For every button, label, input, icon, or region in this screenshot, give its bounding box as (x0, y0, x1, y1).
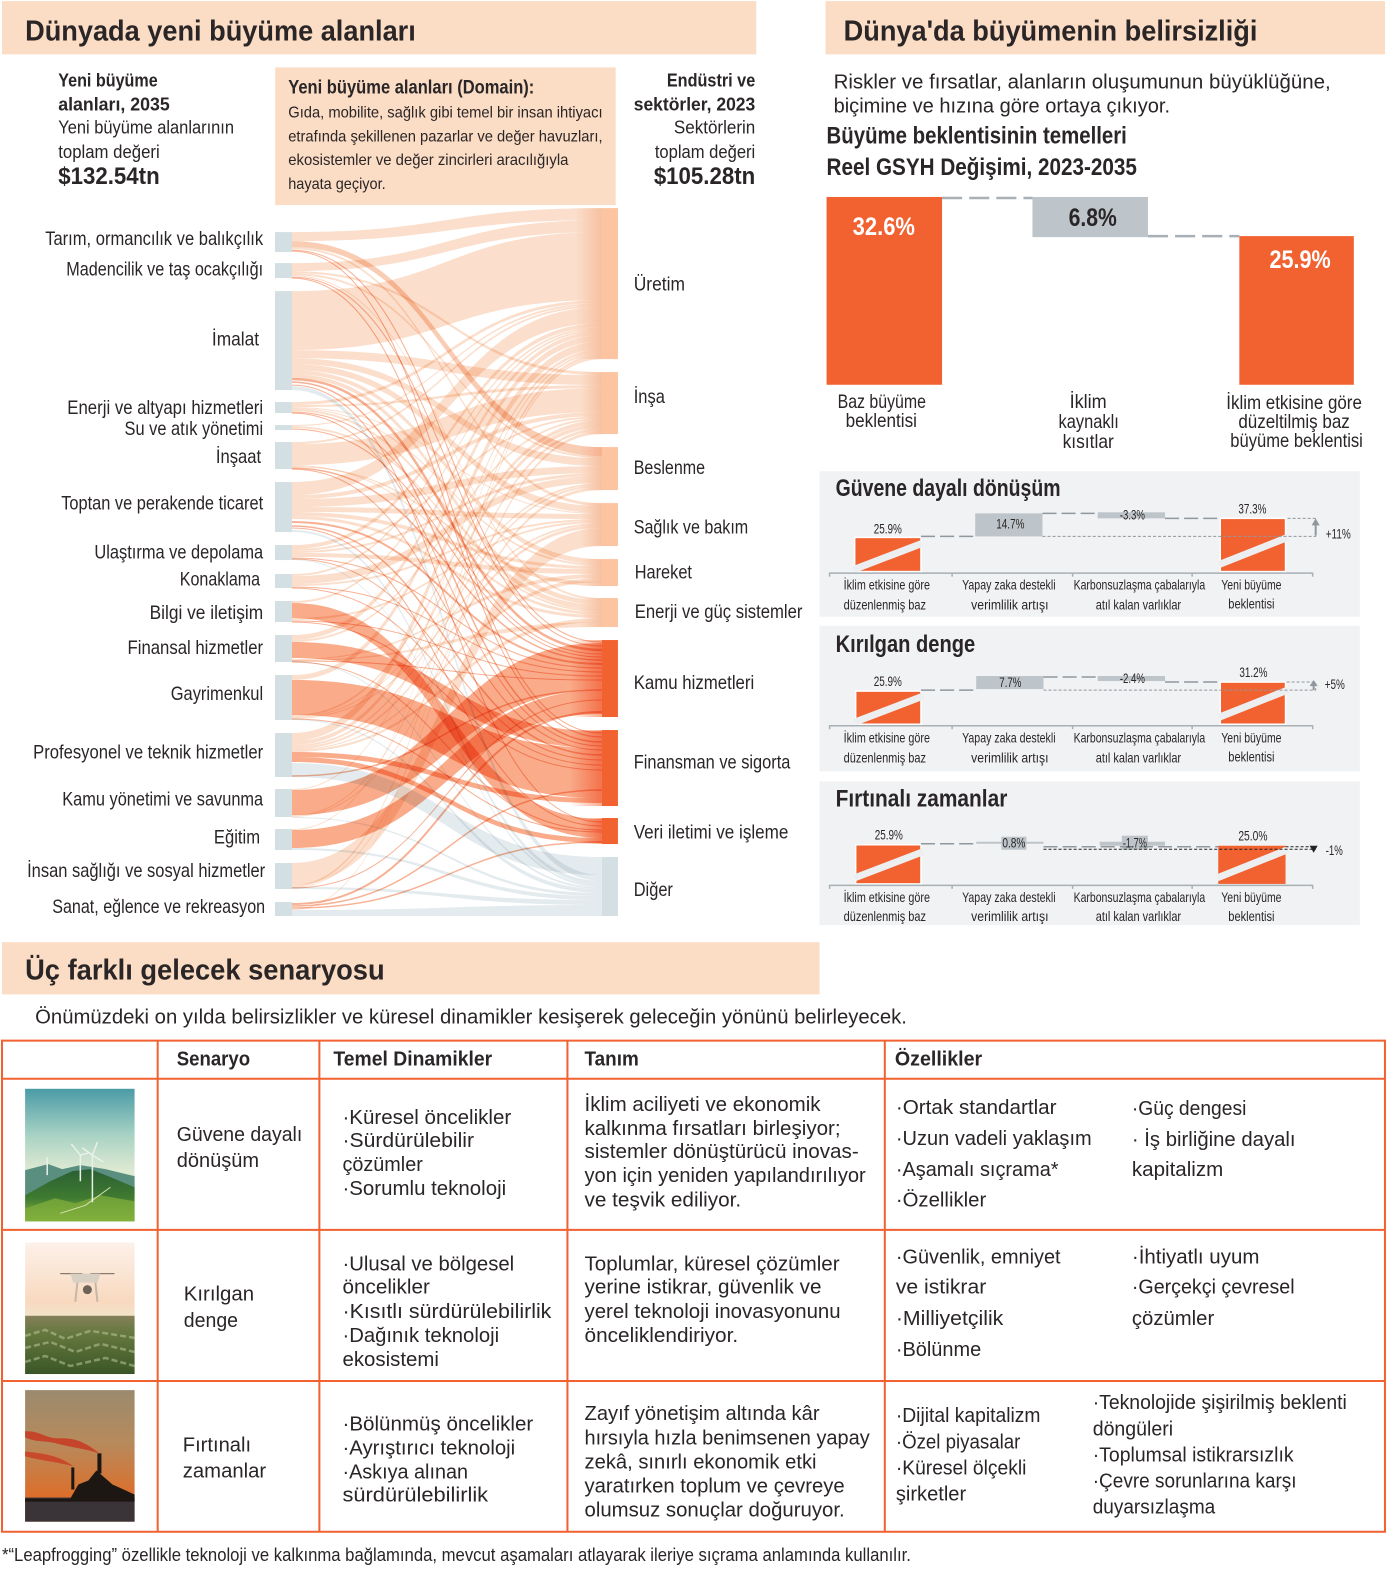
row: Kırılgan denge: çözümler (1132, 1308, 1215, 1330)
intro text: riskler ve fırsatlar (834, 71, 1331, 118)
axis labels: beklentisi (1228, 748, 1274, 764)
bar labels: kaynaklı (1059, 412, 1119, 433)
subtitle: Önümüzdeki on yılda belirsizlikler ve küresel dinamikler kesişerek geleceğin yönünü belirleyecek. (35, 1007, 907, 1029)
source labels: Sanat, eğlence ve rekreasyon (52, 897, 265, 918)
text block: yeni büyüme alanları toplam değeri: Yeni büyüme (58, 70, 158, 90)
row: Kırılgan denge: ekosistemi (342, 1349, 439, 1371)
row: Fırtınalı zamanlar: ·Dijital kapitalizm (896, 1405, 1040, 1427)
source labels: İmalat (212, 330, 260, 351)
source labels: Su ve atık yönetimi (125, 419, 263, 440)
row: Kırılgan denge: ·Ulusal ve bölgesel (342, 1254, 514, 1276)
chart heading: Büyüme beklentisinin temelleri (827, 123, 1127, 150)
axis labels: düzenlenmiş baz (844, 749, 926, 765)
row: Kırılgan denge: ·Bölünme (896, 1339, 981, 1361)
row: Güvene dayalı dönüşüm: ·Güç dengesi (1132, 1098, 1246, 1120)
waterfall: +5% (1325, 676, 1345, 692)
section heading: Dünyada yeni büyüme alanları: Dünyada yeni büyüme alanları (25, 15, 416, 47)
table header (177, 1048, 982, 1071)
row: Güvene dayalı dönüşüm: kalkınma fırsatları birleşiyor; (585, 1118, 841, 1140)
row: Fırtınalı zamanlar: olumsuz sonuçlar doğuruyor. (585, 1500, 845, 1522)
waterfall: -2.4% (1120, 670, 1145, 686)
bar: baz büyüme: 32.6% (853, 213, 915, 241)
axis labels: Yapay zaka destekli (962, 889, 1056, 905)
waterfall: 25.9% (874, 520, 902, 536)
target labels: Enerji ve güç sistemler (635, 602, 803, 623)
bar labels: Baz büyüme (838, 392, 926, 413)
axis labels (844, 576, 1282, 613)
row: Güvene dayalı dönüşüm: ·Sorumlu teknoloji (342, 1178, 506, 1200)
row: Kırılgan denge: yerel teknoloji inovasyonunu (585, 1301, 841, 1323)
target labels: İnşa (634, 387, 665, 408)
row: Kırılgan denge: Kırılgan (184, 1284, 254, 1306)
table header: Senaryo (177, 1049, 250, 1071)
bar: baz büyüme (827, 197, 942, 385)
row: Kırılgan denge: ·Kısıtlı sürdürülebilirlik (342, 1301, 552, 1323)
target labels: Sağlık ve bakım (634, 517, 748, 538)
row: Güvene dayalı dönüşüm: ·Ortak standartlar (896, 1097, 1057, 1119)
bar: düzeltilmiş baz (1239, 236, 1354, 385)
bar labels: İklim (1070, 392, 1107, 413)
row: Fırtınalı zamanlar: ·Özel piyasalar (896, 1431, 1021, 1453)
intro text: riskler ve fırsatlar: biçimine ve hızına göre ortaya çıkıyor. (834, 96, 1170, 118)
text block: endüstri ve sektörler toplam değeri: toplam değeri (655, 142, 755, 162)
row: Fırtınalı zamanlar: Zayıf yönetişim altında kâr (585, 1403, 820, 1425)
bar labels: İklim etkisine göre (1226, 393, 1362, 414)
axis labels: atıl kalan varlıklar (1096, 749, 1181, 765)
axis labels: düzenlenmiş baz (844, 908, 926, 924)
callout: domain definition (275, 67, 616, 205)
sankey source nodes (275, 232, 292, 916)
source labels: Enerji ve altyapı hizmetleri (67, 398, 263, 419)
row: Kırılgan denge: öncelikler (342, 1277, 430, 1299)
bar: iklim kaynaklı kısıtlar: 6.8% (1069, 204, 1117, 232)
panel: Kırılgan denge: Kırılgan denge (836, 631, 975, 658)
text block: endüstri ve sektörler toplam değeri: Endüstri ve (667, 70, 755, 90)
row: Fırtınalı zamanlar: ·Teknolojide şişirilmiş beklenti (1093, 1392, 1347, 1414)
row: Kırılgan denge: ·İhtiyatlı uyum (1132, 1246, 1259, 1269)
section heading: Dünya'da büyümenin belirsizliği: Dünya'da büyümenin belirsizliği (844, 15, 1257, 47)
row: Güvene dayalı dönüşüm: yon için yeniden yapılandırılıyor (585, 1165, 866, 1187)
axis labels: verimlilik artışı (971, 908, 1049, 924)
target labels: Hareket (635, 563, 693, 584)
bar: düzeltilmiş baz: 25.9% (1269, 246, 1331, 274)
waterfall: +11% (1326, 525, 1351, 541)
panel: Fırtınalı zamanlar: Fırtınalı zamanlar (836, 786, 1008, 813)
panel: Fırtınalı zamanlar (820, 781, 1360, 925)
row: Güvene dayalı dönüşüm (177, 1093, 1296, 1211)
section heading: Dünyada yeni büyüme alanları (2, 1, 756, 54)
sankey flows (292, 208, 602, 916)
waterfall: 25.9% (875, 827, 903, 843)
waterfall: 25.9% (874, 673, 902, 689)
row: Fırtınalı zamanlar: Fırtınalı (183, 1434, 251, 1456)
source labels: Bilgi ve iletişim (150, 603, 263, 624)
source labels: Konaklama (180, 570, 260, 591)
row: Güvene dayalı dönüşüm: ·Özellikler (896, 1189, 987, 1211)
source labels: İnsan sağlığı ve sosyal hizmetler (27, 861, 266, 882)
axis labels: Karbonsuzlaşma çabalarıyla (1074, 889, 1205, 905)
row: Güvene dayalı dönüşüm: dönüşüm (177, 1150, 259, 1172)
row: Fırtınalı zamanlar: ·Bölünmüş öncelikler (342, 1413, 534, 1435)
row: Güvene dayalı dönüşüm: ve teşvik ediliyor. (585, 1189, 741, 1211)
source labels (27, 229, 266, 918)
source labels: Kamu yönetimi ve savunma (62, 790, 263, 811)
axis labels (844, 888, 1282, 924)
text block: endüstri ve sektörler toplam değeri (634, 70, 755, 190)
row: Fırtınalı zamanlar: ·Küresel ölçekli (896, 1457, 1026, 1479)
row: Kırılgan denge: ·Milliyetçilik (896, 1308, 1004, 1330)
bar labels (838, 392, 1363, 453)
row: Kırılgan denge: ·Dağınık teknoloji (342, 1325, 499, 1347)
sankey target nodes (602, 208, 618, 916)
target labels: Üretim (634, 274, 685, 295)
source labels: Eğitim (214, 828, 260, 849)
source labels: Profesyonel ve teknik hizmetler (33, 742, 264, 763)
row: Fırtınalı zamanlar: sürdürülebilirlik (342, 1485, 489, 1507)
axis labels: Yapay zaka destekli (962, 729, 1056, 745)
table header: Temel Dinamikler (333, 1049, 492, 1071)
axis labels: İklim etkisine göre (844, 728, 930, 745)
waterfall (830, 827, 1343, 889)
axis labels (844, 728, 1282, 765)
scenario table (2, 1041, 1385, 1532)
callout: domain definition: etrafında şekillenen pazarlar ve değer havuzları, (288, 128, 603, 146)
callout: domain definition: Yeni büyüme alanları (Domain): (288, 78, 534, 99)
axis labels: Yeni büyüme (1221, 889, 1282, 905)
waterfall: 37.3% (1238, 500, 1266, 516)
row: Güvene dayalı dönüşüm: Güvene dayalı (177, 1124, 302, 1146)
section heading: Üç farklı gelecek senaryosu: Üç farklı gelecek senaryosu (25, 953, 385, 986)
text block: yeni büyüme alanları toplam değeri: alanları, 2035 (58, 95, 170, 115)
footnote: *“Leapfrogging” özellikle teknoloji ve kalkınma bağlamında, mevcut aşamaları atlayarak ileriye sıçrama anlamında kullanılır. (2, 1545, 911, 1565)
row: Güvene dayalı dönüşüm: · İş birliğine dayalı (1132, 1128, 1296, 1151)
axis labels: Karbonsuzlaşma çabalarıyla (1074, 577, 1205, 593)
axis labels: Karbonsuzlaşma çabalarıyla (1074, 729, 1205, 745)
row: Fırtınalı zamanlar: yaratırken toplum ve çevreye (585, 1476, 845, 1498)
text block: endüstri ve sektörler toplam değeri: sektörler, 2023 (634, 95, 755, 115)
chart heading (827, 123, 1137, 181)
bar labels: büyüme beklentisi (1230, 431, 1363, 452)
row: Fırtınalı zamanlar: döngüleri (1093, 1418, 1173, 1440)
row: Kırılgan denge: ·Gerçekçi çevresel (1132, 1277, 1295, 1299)
waterfall (830, 500, 1351, 577)
row: Fırtınalı zamanlar: zekâ, sınırlı ekonomik etki (585, 1451, 817, 1473)
table header: Özellikler (895, 1048, 982, 1071)
row: Fırtınalı zamanlar: şirketler (896, 1484, 966, 1506)
source labels: Toptan ve perakende ticaret (61, 493, 264, 514)
axis labels: beklentisi (1228, 596, 1274, 612)
text block: yeni büyüme alanları toplam değeri (58, 70, 234, 190)
text block: endüstri ve sektörler toplam değeri: Sektörlerin (674, 118, 755, 138)
source labels: İnşaat (216, 447, 262, 468)
axis labels: Yeni büyüme (1221, 729, 1282, 745)
source labels: Madencilik ve taş ocakçılığı (66, 259, 263, 280)
bar labels: beklentisi (846, 411, 917, 432)
row: Kırılgan denge: ve istikrar (896, 1277, 987, 1299)
row: Fırtınalı zamanlar (183, 1392, 1347, 1522)
waterfall: 7.7% (999, 674, 1021, 690)
waterfall: 25.0% (1238, 828, 1267, 844)
row: Fırtınalı zamanlar: hırsıyla hızla benimsenen yapay (585, 1427, 870, 1449)
bar labels: kısıtlar (1063, 432, 1114, 453)
axis labels: Yeni büyüme (1221, 577, 1282, 593)
axis labels: atıl kalan varlıklar (1096, 908, 1181, 924)
row: Fırtınalı zamanlar: ·Çevre sorunlarına karşı (1093, 1471, 1297, 1493)
photo: factory chimneys at sunset (25, 1390, 135, 1522)
axis labels: İklim etkisine göre (844, 888, 930, 905)
row: Fırtınalı zamanlar: ·Toplumsal istikrarsızlık (1093, 1444, 1294, 1466)
waterfall chart: baseline growth (827, 197, 1363, 453)
row: Kırılgan denge: önceliklendiriyor. (585, 1325, 738, 1347)
row: Fırtınalı zamanlar: zamanlar (183, 1460, 266, 1482)
row: Güvene dayalı dönüşüm: ·Sürdürülebilir (342, 1130, 474, 1152)
callout: domain definition: ekosistemler ve değer zincirleri aracılığıyla (288, 151, 569, 169)
waterfall: 0.8% (1002, 835, 1025, 851)
panel: Güvene dayalı dönüşüm (820, 471, 1360, 617)
target labels: Beslenme (634, 458, 705, 479)
panel: Kırılgan denge (820, 626, 1360, 771)
row: Güvene dayalı dönüşüm: ·Küresel öncelikler (342, 1107, 512, 1129)
source labels: Ulaştırma ve depolama (94, 543, 263, 564)
axis labels: Yapay zaka destekli (962, 577, 1056, 593)
row: Kırılgan denge: yerine istikrar, güvenlik ve (585, 1277, 822, 1299)
row: Güvene dayalı dönüşüm: kapitalizm (1132, 1159, 1223, 1181)
table grid (2, 1041, 1385, 1532)
text block: yeni büyüme alanları toplam değeri: $132.54tn (58, 163, 160, 190)
target labels: Diğer (634, 880, 673, 901)
bar labels: düzeltilmiş baz (1238, 412, 1350, 433)
intro text: riskler ve fırsatlar: Riskler ve fırsatlar, alanların oluşumunun büyüklüğüne, (834, 71, 1331, 93)
section heading: Üç farklı gelecek senaryosu (2, 942, 820, 994)
axis labels: düzenlenmiş baz (844, 597, 926, 613)
target labels (634, 274, 803, 901)
text block: yeni büyüme alanları toplam değeri: Yeni büyüme alanlarının (58, 118, 234, 138)
waterfall: -1.7% (1123, 835, 1147, 851)
row: Güvene dayalı dönüşüm: ·Uzun vadeli yaklaşım (896, 1128, 1092, 1150)
source labels: Tarım, ormancılık ve balıkçılık (45, 229, 264, 250)
axis labels: verimlilik artışı (971, 597, 1049, 613)
callout: domain definition: Gıda, mobilite, sağlık gibi temel bir insan ihtiyacı (288, 104, 603, 122)
text block: endüstri ve sektörler toplam değeri: $105.28tn (654, 163, 755, 190)
panel: Güvene dayalı dönüşüm: Güvene dayalı dönüşüm (836, 475, 1061, 502)
row: Kırılgan denge: ·Güvenlik, emniyet (896, 1247, 1061, 1269)
waterfall: -3.3% (1120, 506, 1145, 522)
table header: Tanım (585, 1049, 639, 1071)
target labels: Veri iletimi ve işleme (634, 823, 788, 844)
waterfall: -1% (1326, 842, 1343, 858)
waterfall: 14.7% (996, 515, 1024, 531)
source labels: Gayrimenkul (171, 684, 263, 705)
axis labels: beklentisi (1228, 908, 1274, 924)
chart heading: Reel GSYH Değişimi, 2023-2035 (827, 154, 1137, 181)
target labels: Finansman ve sigorta (634, 752, 791, 773)
axis labels: verimlilik artışı (971, 749, 1049, 765)
target labels: Kamu hizmetleri (634, 673, 754, 694)
row: Kırılgan denge: Toplumlar, küresel çözümler (585, 1254, 840, 1276)
row: Kırılgan denge (184, 1246, 1295, 1371)
waterfall (830, 664, 1345, 729)
row: Fırtınalı zamanlar: ·Ayrıştırıcı teknoloji (342, 1437, 515, 1459)
section heading: Dünya'da büyümenin belirsizliği (826, 1, 1385, 54)
waterfall: 31.2% (1239, 664, 1267, 680)
photo: drone over crop field (25, 1242, 135, 1374)
callout: domain definition: hayata geçiyor. (288, 175, 386, 193)
row: Güvene dayalı dönüşüm: sistemler dönüştürücü inovas- (585, 1141, 859, 1163)
row: Kırılgan denge: denge (184, 1310, 238, 1332)
text block: yeni büyüme alanları toplam değeri: toplam değeri (58, 142, 160, 162)
axis labels: atıl kalan varlıklar (1096, 597, 1181, 613)
source labels: Finansal hizmetler (128, 638, 264, 659)
axis labels: İklim etkisine göre (844, 576, 930, 593)
row: Fırtınalı zamanlar: duyarsızlaşma (1093, 1497, 1216, 1519)
photo: wind turbines on green hills (25, 1089, 135, 1221)
bar: iklim kaynaklı kısıtlar (1032, 197, 1148, 237)
row: Güvene dayalı dönüşüm: İklim aciliyeti ve ekonomik (585, 1093, 822, 1116)
row: Güvene dayalı dönüşüm: ·Aşamalı sıçrama* (896, 1159, 1059, 1181)
row: Fırtınalı zamanlar: ·Askıya alınan (342, 1461, 468, 1483)
row: Güvene dayalı dönüşüm: çözümler (342, 1154, 423, 1176)
sankey diagram (275, 208, 618, 916)
